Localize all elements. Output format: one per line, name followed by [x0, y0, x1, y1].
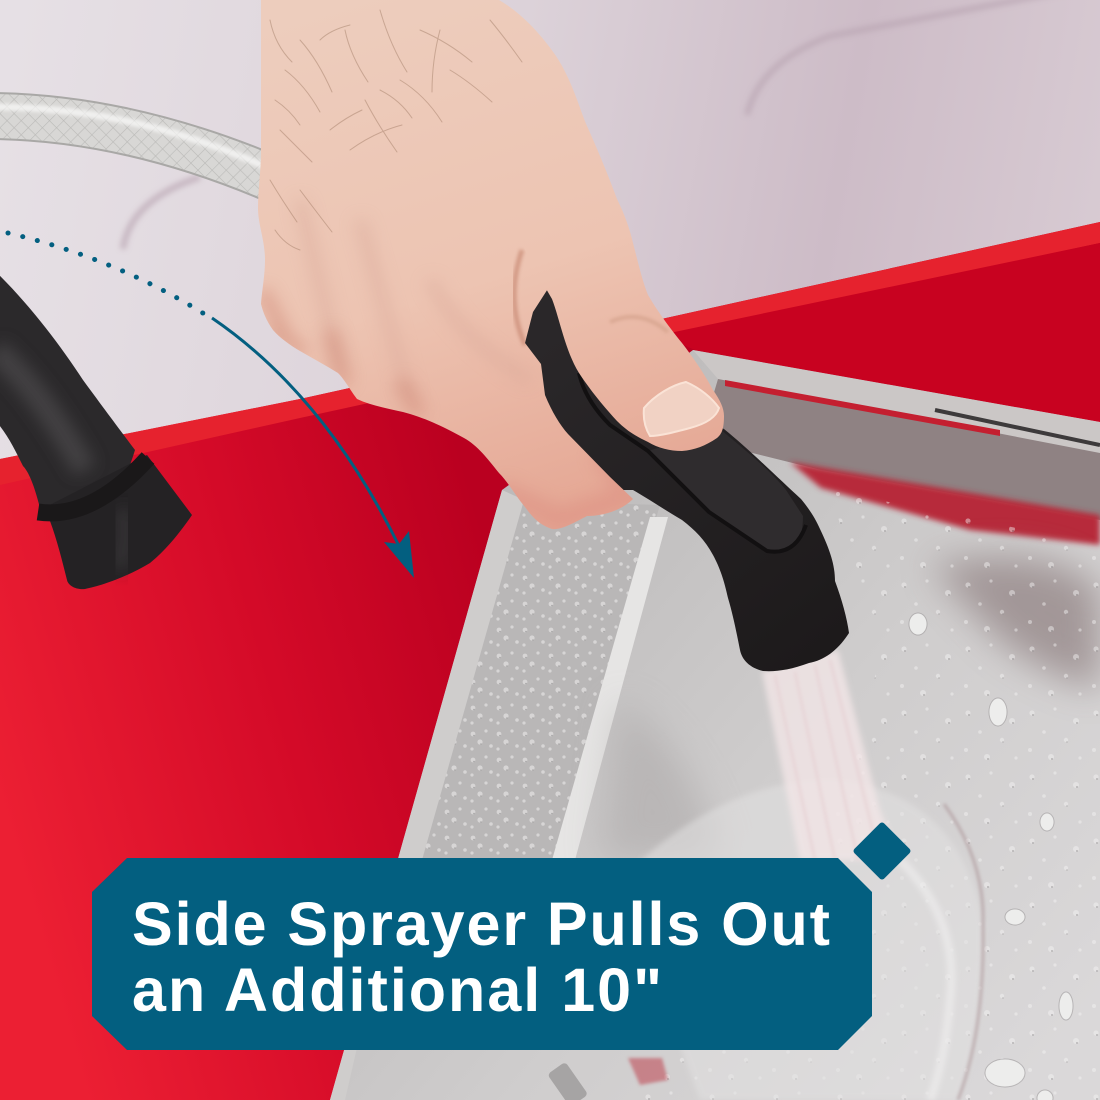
- stainless steel sink: [320, 340, 1100, 1100]
- braided hose: [0, 107, 275, 180]
- dotted motion arrow: [8, 233, 414, 578]
- caption text: an Additional 10": [132, 956, 662, 1024]
- backsplash panel outlines: [123, 0, 1090, 249]
- caption banner: [92, 858, 872, 1050]
- water spray: [762, 650, 900, 860]
- black faucet: [0, 271, 192, 589]
- hand palm: [258, 0, 633, 529]
- side sprayer: [515, 285, 849, 671]
- red countertop: [0, 222, 1100, 1100]
- accent diamond: [852, 821, 912, 881]
- caption text: Side Sprayer Pulls Out: [132, 890, 830, 958]
- caption text: [132, 890, 830, 1024]
- thumb: [522, 199, 724, 451]
